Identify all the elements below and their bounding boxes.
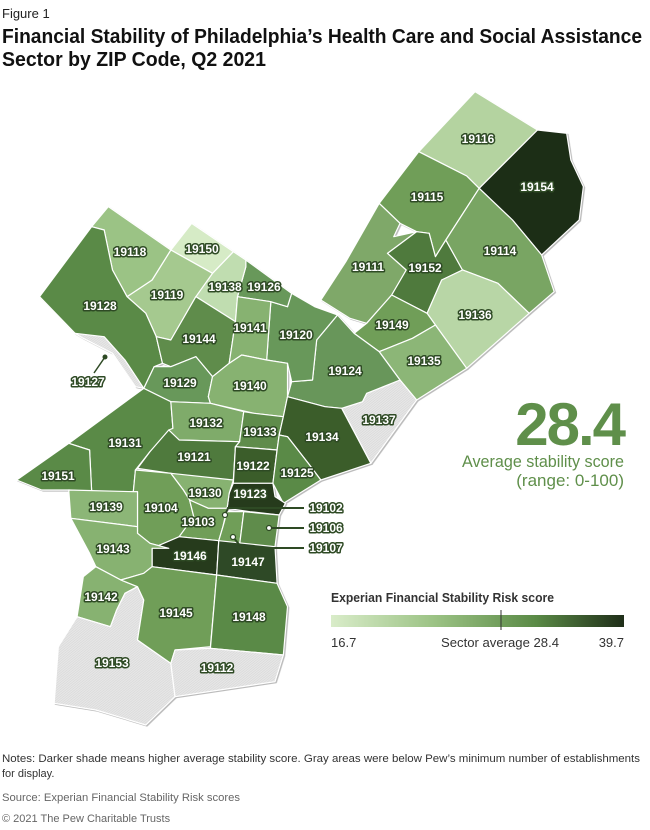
zip labels: 19130 xyxy=(188,486,222,500)
notes: Source: Experian Financial Stability Risk scores xyxy=(2,792,241,804)
notes xyxy=(2,753,641,825)
zip labels: 19136 xyxy=(458,308,492,322)
notes: Notes: Darker shade means higher average stability score. Gray areas were below Pew’s minimum number of establishments xyxy=(2,753,641,765)
title: Sector by ZIP Code, Q2 2021 xyxy=(2,49,266,71)
zip labels: 19140 xyxy=(233,379,267,393)
zip labels: 19116 xyxy=(462,132,495,146)
zip labels: 19135 xyxy=(407,354,441,368)
callout: 19106 xyxy=(266,521,343,535)
legend: Experian Financial Stability Risk score xyxy=(331,590,554,605)
zip labels: 19149 xyxy=(375,318,409,332)
zip labels: 19111 xyxy=(352,260,384,274)
zip labels: 19148 xyxy=(232,610,266,624)
legend xyxy=(331,590,624,650)
legend: Sector average 28.4 xyxy=(441,635,559,650)
callout: 19102 xyxy=(222,501,343,518)
zip labels: 19123 xyxy=(233,487,267,501)
zip labels: 19131 xyxy=(108,436,142,450)
notes: for display. xyxy=(2,768,54,780)
title: Financial Stability of Philadelphia’s Health Care and Social Assistance xyxy=(2,26,642,48)
zip labels: 19144 xyxy=(182,332,216,346)
zip labels: 19139 xyxy=(89,500,123,514)
zip labels: 19114 xyxy=(484,244,517,258)
notes: © 2021 The Pew Charitable Trusts xyxy=(2,813,171,825)
zip labels: 19121 xyxy=(177,450,211,464)
zip labels: 19103 xyxy=(181,515,215,529)
figure label: Figure 1 xyxy=(2,6,50,21)
big stat: average score: (range: 0-100) xyxy=(516,471,624,490)
big stat: average score: 28.4 xyxy=(515,391,627,458)
zip labels: 19134 xyxy=(305,430,339,444)
callout: 19102: 19102 xyxy=(309,501,343,515)
zip labels: 19137 xyxy=(362,413,396,427)
callout: 19106: 19106 xyxy=(309,521,343,535)
zip labels: 19119 xyxy=(151,288,184,302)
zip labels: 19141 xyxy=(233,321,267,335)
zip labels: 19150 xyxy=(185,242,219,256)
zip labels: 19151 xyxy=(41,469,75,483)
zip labels: 19143 xyxy=(96,542,130,556)
map xyxy=(17,92,583,725)
zip labels: 19138 xyxy=(208,280,242,294)
zip labels: 19127 xyxy=(71,375,105,389)
zip labels: 19133 xyxy=(243,425,277,439)
zip labels: 19115 xyxy=(411,190,444,204)
zip labels: 19112 xyxy=(201,661,234,675)
zip labels: 19120 xyxy=(279,328,313,342)
zip labels: 19146 xyxy=(173,549,207,563)
zip labels: 19129 xyxy=(163,376,197,390)
zip labels: 19142 xyxy=(84,590,118,604)
zip labels: 19128 xyxy=(83,299,117,313)
zip labels: 19152 xyxy=(408,261,442,275)
callout: 19127 xyxy=(94,354,108,373)
legend: 39.7 xyxy=(599,635,624,650)
zip labels: 19126 xyxy=(247,280,281,294)
big stat: average score: Average stability score xyxy=(462,452,624,471)
zip labels: 19125 xyxy=(280,466,314,480)
zip labels: 19122 xyxy=(236,459,270,473)
big stat: average score xyxy=(462,391,627,490)
zip labels: 19124 xyxy=(328,364,362,378)
zip labels: 19104 xyxy=(144,501,178,515)
zip labels xyxy=(41,132,554,675)
zip labels: 19145 xyxy=(159,606,193,620)
callout: 19107 xyxy=(230,534,343,555)
zip labels: 19154 xyxy=(520,180,554,194)
zip labels: 19118 xyxy=(114,245,147,259)
zip labels: 19147 xyxy=(231,555,265,569)
callout: 19107: 19107 xyxy=(309,541,343,555)
legend: 16.7 xyxy=(331,635,356,650)
zip labels: 19132 xyxy=(189,416,223,430)
zip labels: 19153 xyxy=(95,656,129,670)
title xyxy=(2,26,642,71)
